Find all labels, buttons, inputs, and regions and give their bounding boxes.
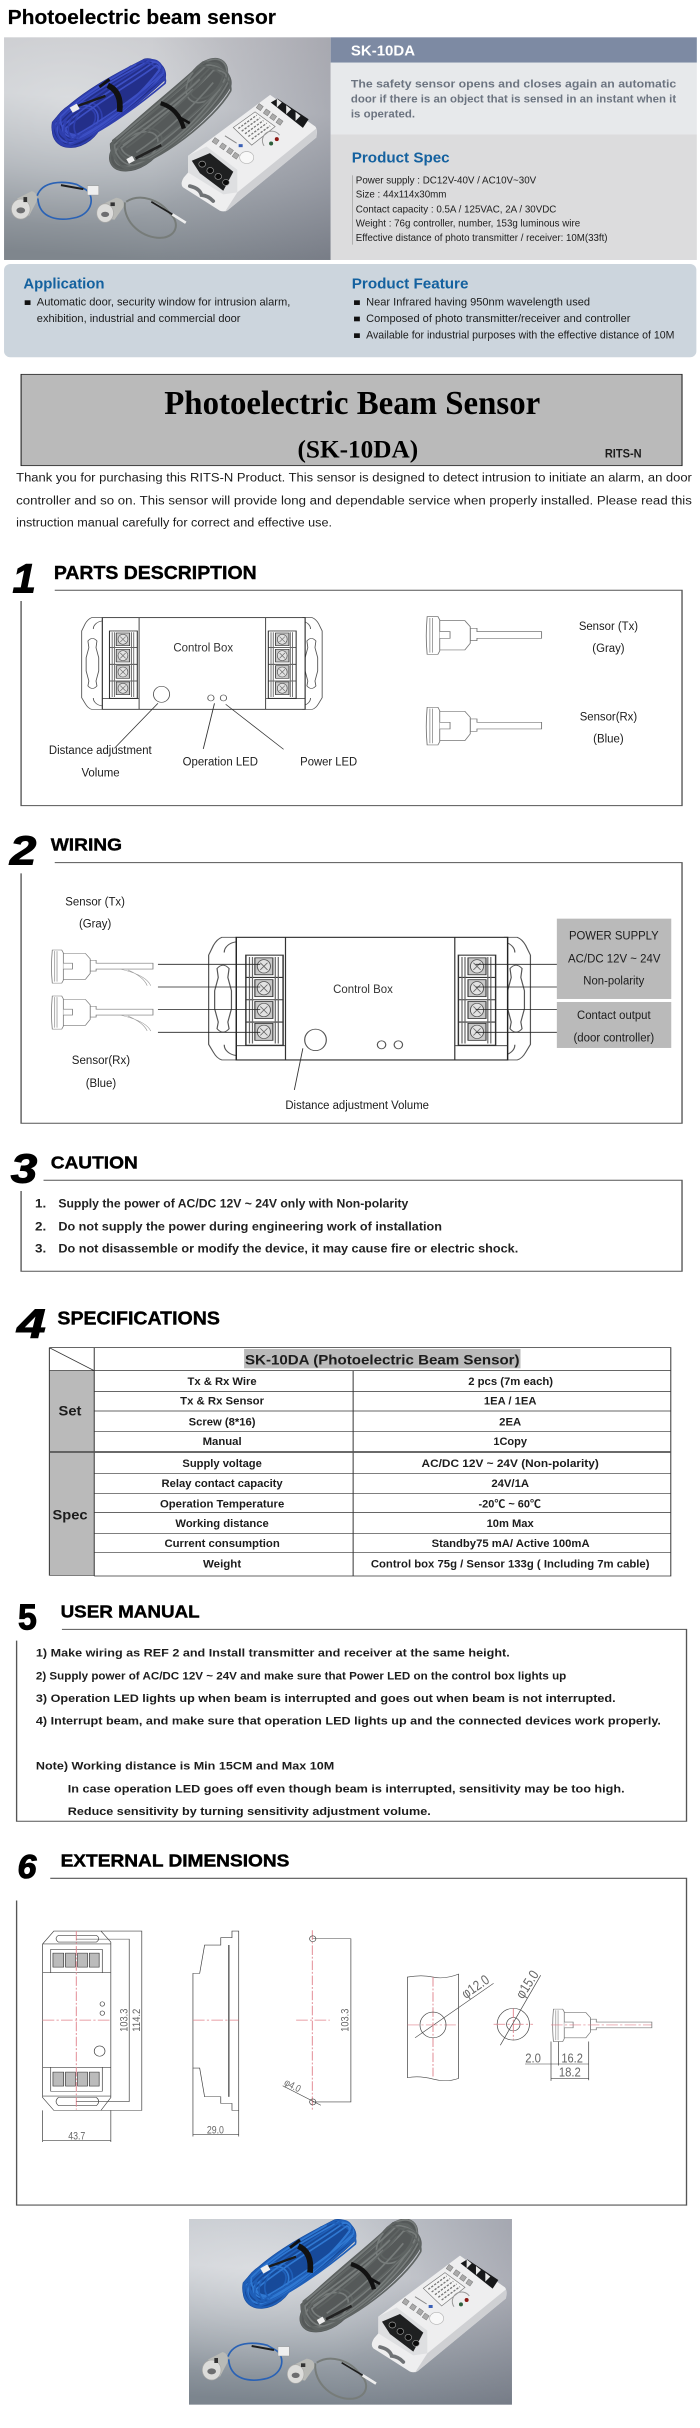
heading 1: 1 bbox=[13, 556, 36, 602]
sensor Tx bbox=[426, 617, 638, 655]
sensor Rx: (Blue) bbox=[593, 733, 624, 746]
caution list: 2. bbox=[35, 1219, 46, 1233]
specification table: Relay contact capacity bbox=[162, 1477, 283, 1490]
side view drawing bbox=[193, 1931, 239, 2137]
heading 5: USER MANUAL bbox=[61, 1601, 200, 1622]
product feature bbox=[352, 275, 674, 341]
manual steps: 1) Make wiring as REF 2 and Install transmitter and receiver at the same height. bbox=[36, 1647, 510, 1659]
mounting holes drawing bbox=[282, 1930, 351, 2110]
application: exhibition, industrial and commercial door bbox=[37, 312, 241, 324]
drill hole drawing: φ12.0 bbox=[458, 1971, 492, 2002]
manual steps: 2) Supply power of AC/DC 12V ~ 24V and make sure that Power LED on the control box lights up bbox=[36, 1669, 566, 1682]
contact output box bbox=[557, 1002, 671, 1048]
power LED label bbox=[226, 704, 357, 769]
note: Reduce sensitivity by turning sensitivity adjustment volume. bbox=[68, 1805, 431, 1818]
power supply box: Non-polarity bbox=[583, 975, 645, 988]
caution list: 3. bbox=[35, 1242, 46, 1255]
description block bbox=[331, 63, 697, 134]
drill hole drawing bbox=[407, 1971, 494, 2081]
sensor Rx: (Blue) bbox=[86, 1077, 116, 1090]
sensor face drawing: φ15.0 bbox=[512, 1967, 542, 2001]
specification table: Tx & Rx Wire bbox=[188, 1375, 257, 1388]
caution list bbox=[35, 1196, 518, 1255]
manual title box: Photoelectric Beam Sensor bbox=[164, 384, 540, 422]
front view drawing bbox=[43, 1931, 143, 2142]
product photo bbox=[4, 37, 331, 260]
specification table: -20℃ ~ 60℃ bbox=[479, 1497, 541, 1510]
specification table: Working distance bbox=[175, 1517, 269, 1530]
sensor face drawing bbox=[494, 1967, 542, 2045]
manual title box bbox=[21, 374, 682, 466]
contact output box: Contact output bbox=[577, 1009, 651, 1022]
control box diagram bbox=[82, 618, 322, 709]
product spec block: Effective distance of photo transmitter / receiver: 10M(33ft) bbox=[356, 232, 608, 244]
specification table: Screw (8*16) bbox=[189, 1415, 256, 1428]
section 3: caution bbox=[11, 1146, 682, 1271]
power LED label: Power LED bbox=[300, 756, 357, 769]
specification table: Spec bbox=[52, 1507, 87, 1523]
heading 2: 2 bbox=[9, 828, 37, 874]
heading 3: 3 bbox=[11, 1146, 37, 1192]
sensor side drawing: 18.2 bbox=[559, 2066, 581, 2080]
panel: application and feature bbox=[4, 264, 696, 357]
specification table bbox=[49, 1348, 671, 1576]
power supply box: AC/DC 12V ~ 24V bbox=[568, 952, 661, 966]
heading 5 bbox=[18, 1597, 200, 1638]
caution list: 1. bbox=[35, 1196, 46, 1210]
distance volume label bbox=[285, 1048, 429, 1112]
heading 6: 6 bbox=[17, 1848, 37, 1885]
front view drawing: 43.7 bbox=[68, 2130, 85, 2142]
sensor Rx: Sensor(Rx) bbox=[72, 1054, 130, 1067]
front view drawing: 103.3 bbox=[119, 2009, 131, 2032]
section 5: user manual bbox=[17, 1597, 687, 1821]
control box: Control Box bbox=[333, 983, 393, 996]
specification table: Supply voltage bbox=[182, 1457, 262, 1470]
specification table: AC/DC 12V ~ 24V (Non-polarity) bbox=[422, 1457, 599, 1470]
product spec block: Product Spec bbox=[352, 149, 450, 166]
product spec block: Size : 44x114x30mm bbox=[356, 188, 447, 200]
product spec block: Contact capacity : 0.5A / 125VAC, 2A / 30VDC bbox=[356, 203, 557, 215]
heading 1: PARTS DESCRIPTION bbox=[54, 562, 257, 583]
heading 6: EXTERNAL DIMENSIONS bbox=[61, 1852, 290, 1871]
heading 4: 4 bbox=[16, 1301, 46, 1347]
specification table: Tx & Rx Sensor bbox=[180, 1395, 264, 1407]
product spec block: Weight : 76g controller, number, 153g luminous wire bbox=[356, 217, 581, 229]
manual title box: RITS-N bbox=[605, 446, 642, 460]
control box diagram: Control Box bbox=[173, 642, 233, 655]
sensor side drawing: 16.2 bbox=[561, 2052, 583, 2066]
sensor Tx: (Gray) bbox=[592, 642, 625, 655]
specification table: Manual bbox=[203, 1435, 242, 1448]
product spec block: Power supply : DC12V-40V / AC10V~30V bbox=[356, 174, 536, 186]
caution list: Supply the power of AC/DC 12V ~ 24V only with Non-polarity bbox=[58, 1196, 409, 1210]
operation LED label: Operation LED bbox=[183, 756, 258, 769]
specification table: 10m Max bbox=[487, 1517, 534, 1530]
model bar: SK-10DA bbox=[351, 42, 415, 59]
distance adjustment label: Volume bbox=[81, 766, 120, 780]
mounting holes drawing: 103.3 bbox=[339, 2009, 351, 2032]
heading 2: WIRING bbox=[51, 835, 122, 855]
manual steps bbox=[36, 1647, 661, 1727]
product feature: Near Infrared having 950nm wavelength used bbox=[366, 295, 590, 308]
sensor Tx bbox=[51, 896, 153, 986]
power supply box: POWER SUPPLY bbox=[569, 929, 659, 943]
wires bbox=[158, 964, 557, 1032]
heading 5: 5 bbox=[18, 1597, 37, 1638]
side view drawing: 29.0 bbox=[207, 2124, 224, 2136]
specification table: 2 pcs (7m each) bbox=[468, 1375, 553, 1388]
heading 1 bbox=[13, 556, 257, 602]
sensor Tx: Sensor (Tx) bbox=[65, 896, 125, 909]
heading 3: CAUTION bbox=[51, 1152, 138, 1173]
specification table: Set bbox=[59, 1403, 82, 1419]
panel: product overview bbox=[4, 37, 697, 260]
sensor side drawing bbox=[525, 2009, 652, 2081]
specification table: 1EA / 1EA bbox=[484, 1395, 537, 1407]
manual steps: 3) Operation LED lights up when beam is interrupted and goes out when beam is not interrupted. bbox=[36, 1692, 616, 1705]
application: Application bbox=[23, 275, 105, 292]
intro paragraph: instruction manual carefully for correct and effective use. bbox=[16, 517, 332, 530]
description block: is operated. bbox=[351, 108, 415, 120]
specification table: 1Copy bbox=[493, 1435, 528, 1448]
sensor side drawing: 2.0 bbox=[525, 2052, 541, 2066]
specification table: Operation Temperature bbox=[160, 1497, 284, 1510]
application: Automatic door, security window for intrusion alarm, bbox=[37, 295, 290, 308]
heading 4: SPECIFICATIONS bbox=[57, 1307, 220, 1329]
sensor Rx bbox=[51, 996, 153, 1090]
manual title box: (SK-10DA) bbox=[297, 435, 418, 463]
bottom product photo bbox=[189, 2212, 512, 2405]
product spec block bbox=[331, 134, 697, 260]
specification table: Weight bbox=[203, 1558, 242, 1570]
section 4: specifications bbox=[16, 1301, 671, 1576]
sensor Rx bbox=[426, 707, 637, 746]
distance volume label: Distance adjustment Volume bbox=[285, 1099, 429, 1112]
heading 2 bbox=[9, 828, 122, 874]
application bbox=[23, 275, 290, 324]
operation LED label bbox=[183, 703, 258, 769]
distance adjustment label: Distance adjustment bbox=[49, 744, 152, 757]
section 2: wiring bbox=[9, 828, 682, 1123]
sensor Tx: Sensor (Tx) bbox=[579, 620, 638, 633]
specification table: 24V/1A bbox=[491, 1477, 530, 1490]
specification table: Standby75 mA/ Active 100mA bbox=[432, 1537, 590, 1550]
contact output box: (door controller) bbox=[573, 1031, 654, 1045]
sensor Tx: (Gray) bbox=[79, 918, 111, 931]
heading 6 bbox=[17, 1848, 290, 1885]
page title: Photoelectric beam sensor bbox=[8, 6, 276, 29]
caution list: Do not disassemble or modify the device, it may cause fire or electric shock. bbox=[58, 1242, 518, 1255]
specification table: 2EA bbox=[499, 1415, 522, 1428]
product feature: Product Feature bbox=[352, 275, 469, 292]
front view drawing: 114.2 bbox=[131, 2009, 143, 2032]
caution list: Do not supply the power during engineering work of installation bbox=[58, 1219, 442, 1233]
specification table: SK-10DA (Photoelectric Beam Sensor) bbox=[245, 1352, 520, 1368]
heading 3 bbox=[11, 1146, 138, 1192]
note: Note) Working distance is Min 15CM and Max 10M bbox=[36, 1759, 334, 1772]
model bar bbox=[331, 37, 697, 63]
distance adjustment label bbox=[49, 703, 158, 780]
mounting holes drawing: φ4.0 bbox=[282, 2077, 303, 2095]
section 1: parts description bbox=[13, 556, 682, 806]
note bbox=[36, 1759, 625, 1818]
sensor Rx: Sensor(Rx) bbox=[580, 711, 637, 724]
intro paragraph bbox=[16, 472, 692, 530]
heading 4 bbox=[16, 1301, 220, 1347]
specification table: Current consumption bbox=[164, 1537, 280, 1550]
power supply box bbox=[557, 919, 671, 999]
control box bbox=[209, 937, 530, 1060]
section 6: external dimensions bbox=[17, 1848, 687, 2205]
